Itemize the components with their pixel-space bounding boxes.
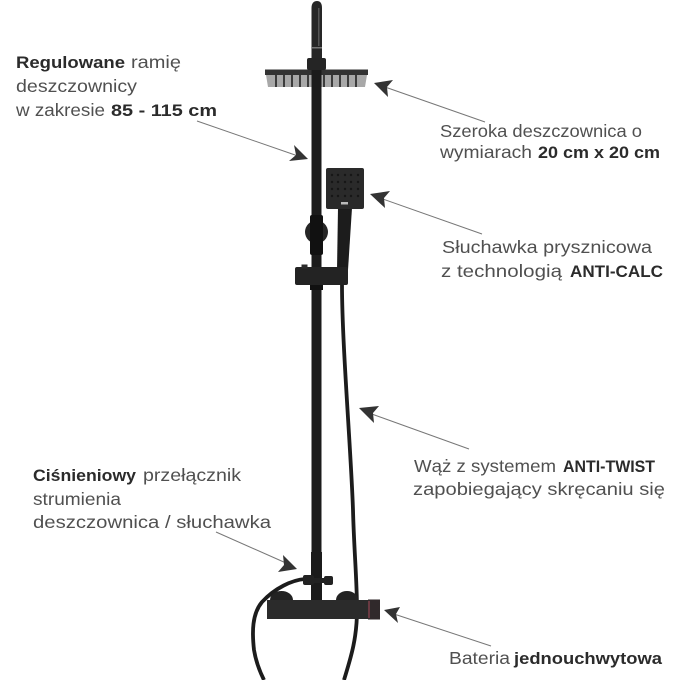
callout: diverter: deszczownica / słuchawka — [33, 512, 271, 532]
right hose — [342, 285, 357, 680]
shower set — [253, 1, 380, 680]
callout: rain shower: wymiarach — [439, 142, 532, 162]
callout: diverter — [33, 465, 297, 572]
left hose — [253, 579, 305, 680]
arrow — [289, 145, 308, 161]
valve and diverter — [267, 552, 380, 620]
callout: rain shower: Szeroka deszczownica o — [440, 121, 642, 141]
callout: hose: zapobiegający skręcaniu się — [413, 479, 665, 499]
slider holder — [295, 264, 348, 290]
overhead arm — [312, 1, 322, 58]
callout: adjustable arm — [15, 52, 308, 161]
callout: hose: ANTI-TWIST — [563, 457, 656, 476]
callout: adjustable arm: Regulowane — [16, 53, 125, 72]
wall bracket — [305, 215, 328, 255]
arrow — [359, 406, 379, 423]
callout: rain shower — [374, 80, 660, 162]
vertical rail — [312, 70, 322, 552]
callout: hand shower: ANTI-CALC — [570, 262, 663, 281]
callout: hose — [359, 406, 665, 499]
callout: adjustable arm: deszczownicy — [16, 76, 137, 96]
hand shower — [326, 168, 364, 270]
callout: mixer — [384, 607, 663, 668]
callout: diverter: strumienia — [33, 489, 121, 509]
callout: rain shower: 20 cm x 20 cm — [538, 143, 660, 162]
rain shower head — [265, 58, 368, 87]
callout: hand shower — [370, 191, 663, 281]
arrow — [384, 607, 400, 623]
callout: diverter: przełącznik — [143, 465, 241, 485]
callout: adjustable arm: 85 - 115 cm — [111, 101, 217, 120]
callout: mixer: Bateria — [449, 648, 510, 668]
arrow — [374, 80, 393, 97]
callout: diverter: Ciśnieniowy — [33, 466, 137, 485]
callout: adjustable arm: ramię — [131, 52, 181, 72]
callout: mixer: jednouchwytowa — [513, 649, 663, 668]
callout: hand shower: Słuchawka prysznicowa — [442, 237, 652, 257]
callout: hose: Wąż z systemem — [414, 456, 556, 476]
callout: adjustable arm: w zakresie — [15, 100, 105, 120]
arrow — [278, 555, 297, 572]
arrow — [370, 191, 390, 208]
callout: hand shower: z technologią — [441, 261, 562, 281]
